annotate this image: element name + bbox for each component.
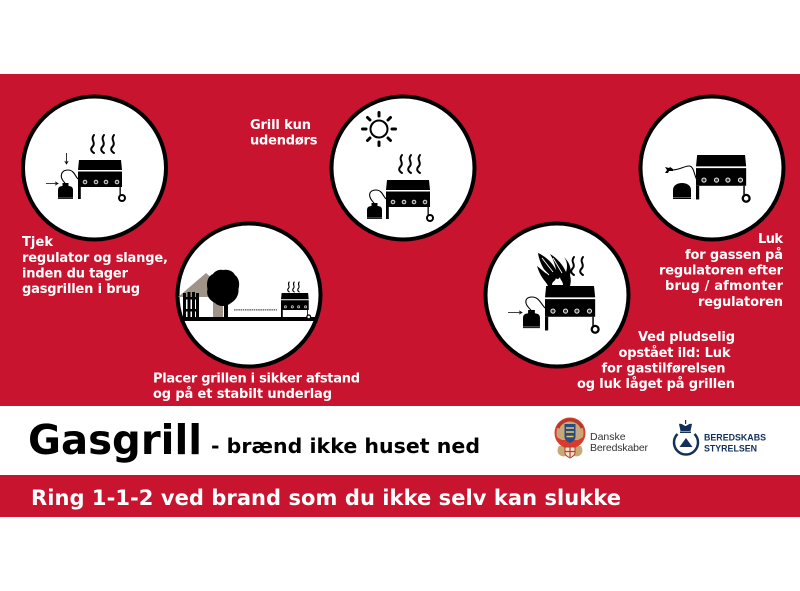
text: close the gas (659, 232, 784, 310)
emergency call text: Ring 1-1-2 ved brand som du ikke selv kan slukke (31, 486, 621, 510)
text: close the gas: for gassen på (685, 248, 783, 263)
text: close the gas: Luk (758, 232, 783, 247)
logo: Beredskabsstyrelsen: STYRELSEN (704, 444, 757, 454)
text: close the gas: regulatoren (698, 295, 783, 310)
icon: grill with tank (508, 286, 599, 333)
text: sudden fire: Ved pludselig (638, 330, 735, 345)
text: safe distance: Placer grillen i sikker afstand (153, 372, 360, 387)
text: check regulator: gasgrillen i brug (22, 282, 140, 297)
text: safe distance (153, 372, 360, 402)
crest (556, 418, 584, 458)
logo: Danske Beredskaber: Beredskaber (590, 442, 648, 454)
icon: sun (362, 112, 396, 146)
logo: Danske Beredskaber (556, 418, 648, 458)
icon: grill with tank (367, 155, 433, 221)
panel: sudden fire (486, 224, 735, 392)
circle 2 (178, 224, 320, 366)
text: outdoors only: udendørs (250, 134, 318, 148)
text: check regulator: regulator og slange, (22, 251, 168, 266)
text: safe distance: og på et stabilt underlag (153, 387, 332, 402)
title (28, 416, 480, 464)
text: sudden fire: opstået ild: Luk (618, 346, 731, 361)
distance arrow (234, 309, 277, 311)
text: outdoors only (250, 118, 318, 148)
icon: flames (537, 253, 583, 286)
emblem (674, 420, 698, 454)
text: sudden fire (577, 330, 735, 392)
text: check regulator (22, 235, 168, 297)
panel: close the gas (640, 96, 784, 310)
circle 1 (23, 96, 166, 240)
footer banner (0, 475, 800, 517)
panel: outdoors only (250, 96, 474, 240)
text: close the gas: regulatoren efter (659, 264, 784, 278)
circle 3 (332, 96, 474, 240)
circle 5 (640, 96, 784, 240)
red background panel (0, 74, 800, 406)
icon: small grill (281, 282, 311, 319)
icon: grill with detached regulator (665, 155, 750, 202)
circle 4 (486, 224, 628, 366)
logo: Beredskabsstyrelsen: BEREDSKABS (704, 432, 766, 444)
logo: Beredskabsstyrelsen (674, 420, 766, 454)
title: Gasgrill (28, 416, 202, 464)
text: close the gas: brug / afmonter (665, 279, 784, 294)
logo: Danske Beredskaber: Danske (590, 431, 626, 443)
text: sudden fire: for gastilførelsen (602, 362, 726, 376)
ground line (182, 317, 315, 321)
panel: safe distance (153, 224, 360, 402)
icon: grill with tank and arrows (46, 135, 125, 201)
panel: check regulator and hose (22, 96, 168, 297)
icon: house, fence and tree (178, 270, 239, 318)
text: check regulator: Tjek (22, 235, 53, 250)
text: check regulator: inden du tager (22, 266, 129, 282)
title: - brænd ikke huset ned (211, 434, 480, 458)
text: outdoors only: Grill kun (250, 118, 311, 133)
text: sudden fire: og luk låget på grillen (577, 377, 735, 392)
